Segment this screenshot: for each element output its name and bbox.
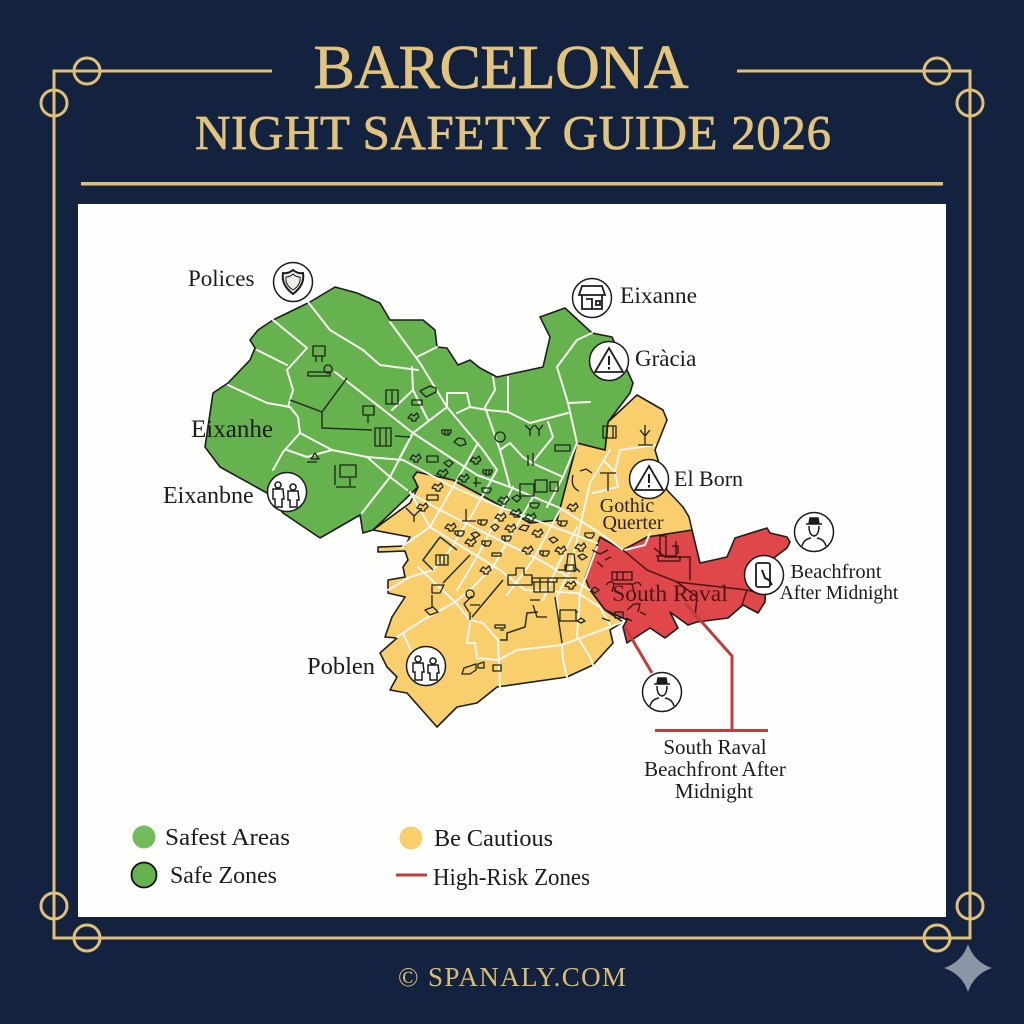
zone: caution yellow bbox=[373, 395, 692, 727]
icon: warning El Born bbox=[630, 460, 668, 498]
zone: high risk red bbox=[585, 528, 790, 643]
red zone streets bbox=[623, 548, 762, 617]
small landmark icons bbox=[307, 346, 653, 674]
title: BARCELONA bbox=[314, 34, 689, 102]
label: Gothic Quarter: Gothic bbox=[600, 495, 654, 517]
label: South Raval Beachfront After Midnight: Beachfront After bbox=[644, 757, 786, 781]
legend bbox=[132, 825, 590, 891]
footer credit: © SPANALY.COM bbox=[398, 962, 626, 992]
label: Gothic Quarter: Querter bbox=[602, 512, 664, 534]
label: South Raval Beachfront After Midnight: South Raval bbox=[663, 735, 767, 759]
icon: man in hat top right bbox=[794, 512, 834, 552]
icon: family Poblen bbox=[406, 646, 446, 686]
dark district boundaries bbox=[290, 378, 562, 643]
map labels bbox=[163, 266, 743, 680]
map labels: Eixanne bbox=[620, 283, 697, 309]
label: Beachfront After Midnight: After Midnight bbox=[780, 583, 899, 604]
legend: be cautious: Be Cautious bbox=[434, 826, 553, 852]
sparkle watermark bbox=[944, 944, 992, 992]
map labels: Gràcia bbox=[635, 346, 696, 371]
red zone landmark icons bbox=[592, 536, 680, 615]
title divider bbox=[81, 182, 943, 186]
icon: phone bbox=[744, 556, 784, 594]
map of Barcelona bbox=[205, 287, 790, 727]
white map panel bbox=[78, 204, 946, 917]
street network bbox=[228, 302, 655, 687]
label: South Raval: South Raval bbox=[612, 581, 728, 607]
zone: safe green bbox=[205, 287, 633, 538]
label: Beachfront After Midnight: Beachfront bbox=[790, 561, 882, 583]
map labels: El Born bbox=[674, 466, 743, 491]
title: NIGHT SAFETY GUIDE 2026 bbox=[195, 105, 831, 160]
icon: man in hat bottom bbox=[642, 672, 682, 712]
red leader lines bbox=[625, 603, 768, 730]
icon: warning Gràcia bbox=[590, 342, 628, 380]
legend: safest areas: Safest Areas bbox=[165, 825, 290, 851]
icon: police shield bbox=[274, 262, 312, 302]
icon: family Eixanbne bbox=[268, 472, 306, 512]
label: South Raval Beachfront After Midnight: Midnight bbox=[675, 779, 753, 803]
map labels: Polices bbox=[188, 266, 254, 291]
map labels: Eixanhe bbox=[191, 416, 273, 443]
icon: shop bbox=[572, 278, 612, 318]
legend: safe zones: Safe Zones bbox=[170, 863, 277, 889]
map labels: Eixanbne bbox=[163, 483, 254, 509]
map labels: Poblen bbox=[307, 653, 375, 680]
title bbox=[195, 34, 831, 160]
legend: high-risk zones: High-Risk Zones bbox=[433, 865, 590, 891]
